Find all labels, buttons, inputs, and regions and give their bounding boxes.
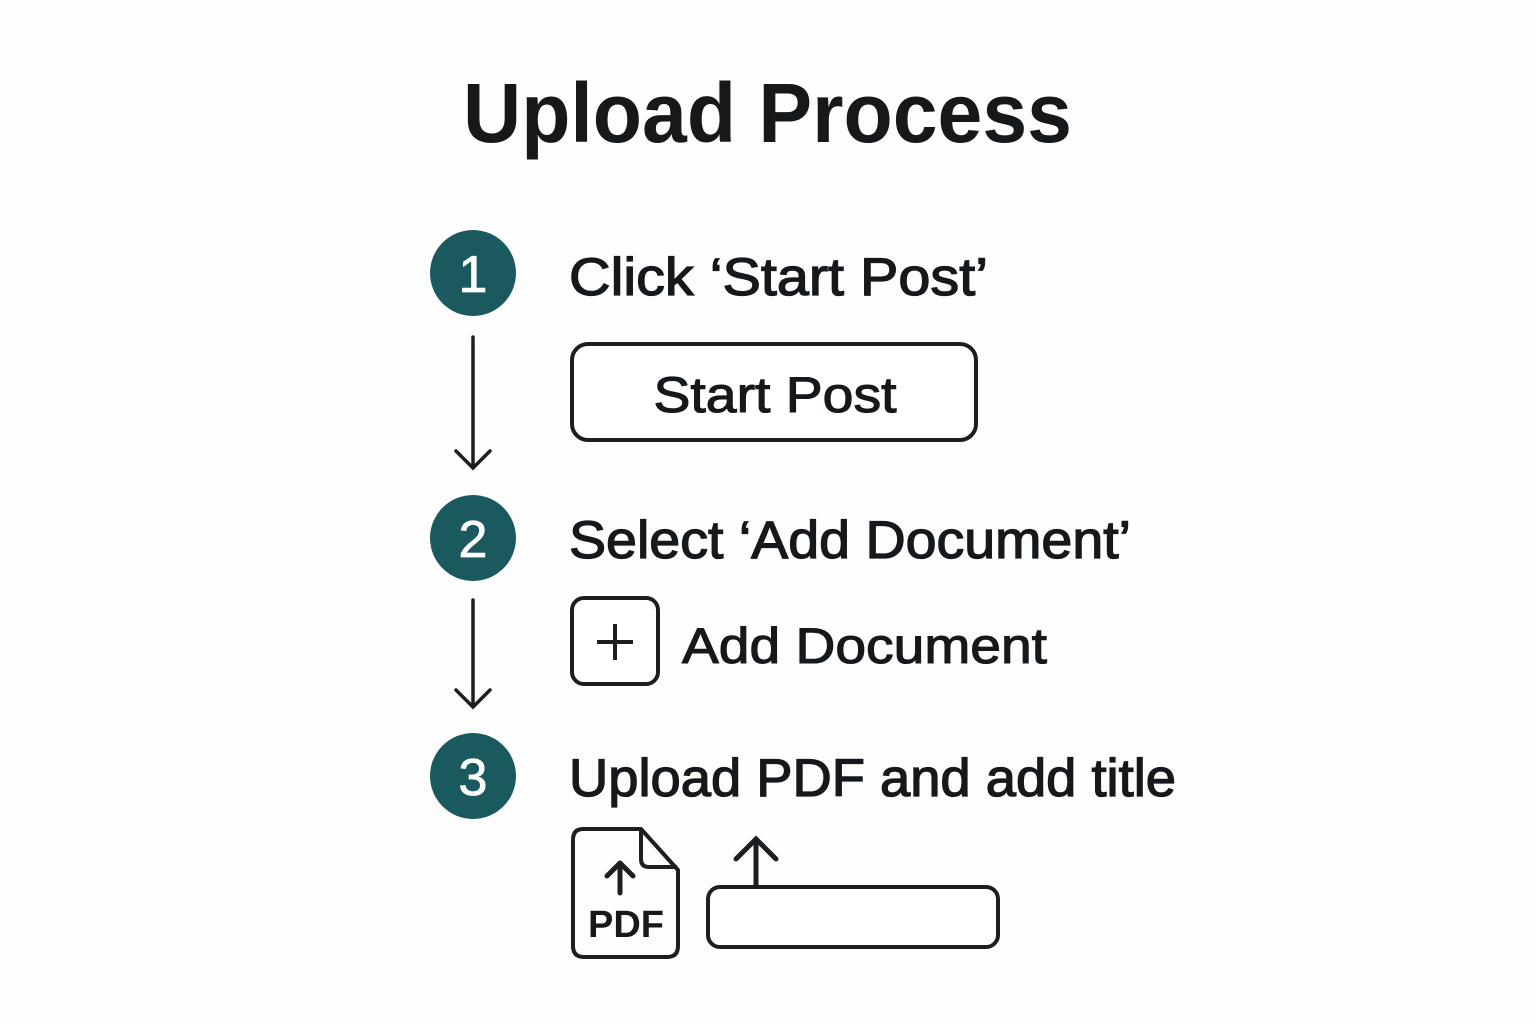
step 1 heading: Click ‘Start Post’ [569,248,988,307]
arrow: step 2 to 3 [456,600,490,707]
step 2 [430,495,1131,684]
icon: PDF file upload: PDF [588,904,664,946]
button: Start Post [572,344,976,440]
icon: step number 2: 2 [459,511,487,569]
icon: title input field with upload arrow [708,839,998,947]
button: Add Document: Add Document [682,618,1047,674]
icon: step number 3 [430,733,516,819]
step 3 heading: Upload PDF and add title [569,749,1176,808]
step 1 [430,230,988,440]
icon: PDF file upload [573,829,678,957]
icon: step number 3: 3 [459,749,487,807]
step 3 [430,733,1176,957]
icon: step number 1 [430,230,516,316]
icon: step number 1: 1 [459,246,487,304]
title: Upload Process [463,66,1072,160]
arrow: step 1 to 2 [456,337,490,468]
button: Add Document [572,598,1047,684]
button: Start Post: Start Post [654,367,897,423]
step 2 heading: Select ‘Add Document’ [569,511,1131,570]
icon: step number 2 [430,495,516,581]
